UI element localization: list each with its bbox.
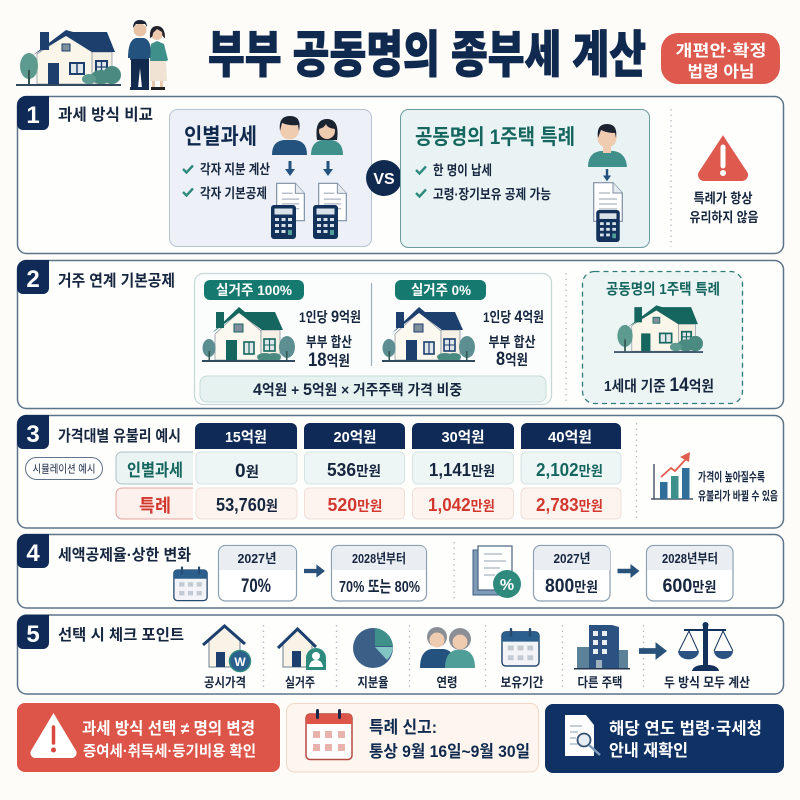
household amount: 1세대 기준 14억원 bbox=[604, 375, 714, 396]
panel: section 5 decision checkpoints bbox=[17, 615, 784, 694]
callout: filing period: 통상 9월 16일~9월 30일 bbox=[369, 742, 530, 761]
badge: draft notice: 법령 아님 bbox=[688, 63, 754, 81]
row label: individual: 인별과세 bbox=[127, 461, 183, 480]
arrows and calculators bbox=[271, 161, 346, 239]
icon: man bbox=[272, 116, 307, 155]
checkpoint: official price: 공시가격 bbox=[204, 675, 246, 690]
pill: 100 percent residence bbox=[204, 280, 304, 300]
badge: draft notice bbox=[661, 33, 780, 84]
arrow to scales bbox=[639, 642, 667, 660]
table column 20: 520만원 bbox=[328, 495, 382, 515]
checkpoint: calculate both bbox=[664, 622, 750, 690]
icon: warning triangle bbox=[699, 137, 747, 180]
deduction values 100 percent: 1인당 9억원 bbox=[299, 307, 361, 326]
icon: navy house bbox=[382, 307, 475, 362]
checkpoint: age couple: 연령 bbox=[436, 675, 458, 690]
rate card 2028: 70% 또는 80% bbox=[339, 578, 420, 596]
table column 30: 1,141만원 bbox=[429, 460, 495, 480]
icon: percent document bbox=[473, 546, 521, 598]
cap card 2028: 600만원 bbox=[662, 576, 716, 597]
cap card 2027: 2027년 bbox=[554, 551, 590, 566]
arrow bbox=[618, 564, 640, 578]
table column 20: 536만원 bbox=[327, 460, 381, 480]
rate card 2027: 70% bbox=[241, 576, 271, 597]
row label: exception: 특례 bbox=[139, 496, 171, 516]
section heading 1: 과세 방식 비교 bbox=[58, 106, 153, 124]
badge: draft notice: 개편안·확정 bbox=[676, 42, 766, 60]
warning note bbox=[690, 191, 758, 225]
table column 15 bbox=[195, 423, 297, 519]
number badge 1: 1 bbox=[26, 102, 40, 129]
icon: woman bbox=[311, 119, 343, 155]
checklist: joint exception: 고령·장기보유 공제 가능 bbox=[433, 187, 551, 202]
table column 15: 0원 bbox=[235, 461, 259, 482]
icon: calendar bbox=[174, 566, 207, 601]
panel: joint single-home exception bbox=[400, 110, 650, 248]
heading: joint exception: 공동명의 1주택 특례 bbox=[415, 126, 575, 149]
chart note: 가격이 높아질수록 bbox=[698, 469, 765, 484]
rate card 2028 bbox=[332, 546, 426, 601]
table column 40 bbox=[521, 423, 621, 519]
number badge 3: 3 bbox=[26, 421, 40, 448]
table column 15: 15억원 bbox=[225, 429, 267, 446]
deduction values 100 percent: 18억원 bbox=[308, 350, 350, 371]
simulation tag bbox=[26, 458, 102, 480]
panel: individual taxation bbox=[170, 110, 372, 246]
pill: 0 percent residence bbox=[395, 280, 486, 300]
rate card 2027: 2027년 bbox=[238, 551, 276, 566]
VS circle bbox=[366, 160, 402, 196]
callout: tax method warning bbox=[17, 703, 280, 772]
cap card 2027: 800만원 bbox=[545, 576, 598, 597]
table column 40: 2,102만원 bbox=[536, 460, 603, 480]
table column 30 bbox=[412, 423, 514, 519]
section heading 5: 선택 시 체크 포인트 bbox=[58, 626, 184, 644]
callout: recheck official guidance: 안내 재확인 bbox=[609, 741, 688, 760]
table column 20: 20억원 bbox=[334, 429, 376, 446]
heading: joint exception: 공동명의 1주택 특례 bbox=[606, 281, 720, 298]
deduction values 0 percent: 부부 합산 bbox=[488, 334, 536, 350]
table column 30: 30억원 bbox=[442, 429, 484, 446]
panel: section 2 residence-linked deduction bbox=[17, 260, 784, 408]
icon: percent document: % bbox=[500, 577, 514, 594]
checkpoint: official price: W bbox=[234, 655, 246, 669]
callout: tax method warning: 과세 방식 선택 ≠ 명의 변경 bbox=[82, 719, 255, 738]
number badge 4: 4 bbox=[26, 540, 40, 567]
checklist: individual taxation bbox=[183, 162, 270, 201]
row label: individual bbox=[116, 452, 193, 484]
icon: white warning triangle bbox=[31, 715, 76, 757]
heading: individual taxation: 인별과세 bbox=[184, 124, 257, 149]
number badge 4 bbox=[17, 534, 49, 568]
VS circle: VS bbox=[373, 171, 395, 188]
cap card 2028 bbox=[646, 546, 733, 601]
deduction values 0 percent bbox=[483, 307, 544, 370]
checkpoint: holding period bbox=[500, 628, 544, 690]
pill: 0 percent residence: 실거주 0% bbox=[411, 282, 472, 298]
number badge 2 bbox=[17, 260, 49, 294]
checkpoint: official price bbox=[203, 626, 250, 690]
checkpoint: share ratio pie: 지분율 bbox=[358, 675, 389, 690]
section heading 3: 가격대별 유불리 예시 bbox=[58, 427, 181, 445]
cap card 2028: 2028년부터 bbox=[662, 551, 718, 566]
chart note bbox=[698, 469, 778, 503]
checkpoint: age couple bbox=[420, 627, 475, 690]
panel: section 3 price simulation bbox=[17, 415, 784, 528]
callout: filing period: 특례 신고: bbox=[369, 718, 437, 737]
checklist: individual taxation: 각자 기본공제 bbox=[200, 186, 267, 201]
simulation tag: 시뮬레이션 예시 bbox=[32, 462, 96, 476]
header illustration: house bbox=[16, 30, 121, 86]
rate card 2028: 2028년부터 bbox=[352, 551, 406, 566]
row label: exception bbox=[116, 488, 193, 519]
warning note: 유리하지 않음 bbox=[690, 210, 758, 225]
arrow, document and calculator bbox=[594, 169, 622, 242]
table column 30: 1,042만원 bbox=[428, 495, 495, 515]
checkpoint: residence: 실거주 bbox=[285, 675, 315, 690]
arrow bbox=[304, 564, 325, 578]
icon: teal house bbox=[614, 305, 703, 353]
panel: residence comparison bbox=[194, 274, 552, 404]
cap card 2027 bbox=[534, 546, 610, 601]
number badge 5 bbox=[17, 615, 49, 649]
table column 40: 40억원 bbox=[548, 429, 592, 446]
chart icon: rising bars bbox=[651, 452, 693, 499]
rate card 2027 bbox=[218, 546, 296, 601]
number badge 3 bbox=[17, 415, 49, 449]
callout: filing period bbox=[286, 704, 538, 772]
table column 20 bbox=[304, 423, 405, 519]
number badge 2: 2 bbox=[26, 266, 40, 293]
icon: teal house bbox=[202, 307, 295, 362]
number badge 1 bbox=[17, 96, 49, 130]
section heading 4: 세액공제율·상한 변화 bbox=[58, 546, 191, 564]
callout: recheck official guidance bbox=[545, 704, 784, 773]
pill: 100 percent residence: 실거주 100% bbox=[216, 282, 293, 298]
icon: document magnifier bbox=[565, 715, 600, 756]
formula bar: 4억원 + 5억원 × 거주주택 가격 비중 bbox=[253, 380, 462, 399]
deduction values 100 percent: 부부 합산 bbox=[306, 334, 352, 350]
checkpoint: residence bbox=[278, 629, 326, 690]
table column 15: 53,760원 bbox=[216, 495, 278, 515]
callout: tax method warning: 증여세·취득세·등기비용 확인 bbox=[83, 743, 256, 760]
panel: joint exception 14 eok bbox=[582, 272, 742, 404]
deduction values 100 percent bbox=[299, 307, 361, 371]
checkpoint: other housing: 다른 주택 bbox=[578, 675, 622, 690]
header illustration: couple bbox=[128, 20, 168, 90]
formula bar bbox=[200, 376, 546, 402]
checkpoint: share ratio pie bbox=[353, 628, 393, 690]
checklist: individual taxation: 각자 지분 계산 bbox=[200, 162, 270, 177]
callout: recheck official guidance: 해당 연도 법령·국세청 bbox=[609, 719, 762, 738]
panel: section 4 credit rate and cap changes bbox=[17, 534, 784, 608]
section heading 2: 거주 연계 기본공제 bbox=[58, 272, 175, 290]
panel: section 1 tax method comparison bbox=[17, 96, 784, 254]
checkpoint: calculate both: 두 방식 모두 계산 bbox=[664, 675, 750, 690]
checklist: joint exception bbox=[416, 163, 551, 202]
deduction values 0 percent: 1인당 4억원 bbox=[483, 307, 544, 326]
number badge 5: 5 bbox=[26, 621, 40, 648]
table column 40: 2,783만원 bbox=[536, 495, 603, 515]
checkpoint: holding period: 보유기간 bbox=[500, 675, 544, 690]
checkpoint: other housing bbox=[574, 625, 630, 690]
checklist: joint exception: 한 명이 납세 bbox=[433, 163, 492, 178]
title: 부부 공동명의 종부세 계산 bbox=[208, 27, 646, 83]
icon: filing calendar bbox=[306, 709, 352, 760]
deduction values 0 percent: 8억원 bbox=[496, 349, 528, 370]
warning note: 특례가 항상 bbox=[694, 191, 753, 206]
icon: taxpayer bbox=[588, 124, 627, 167]
